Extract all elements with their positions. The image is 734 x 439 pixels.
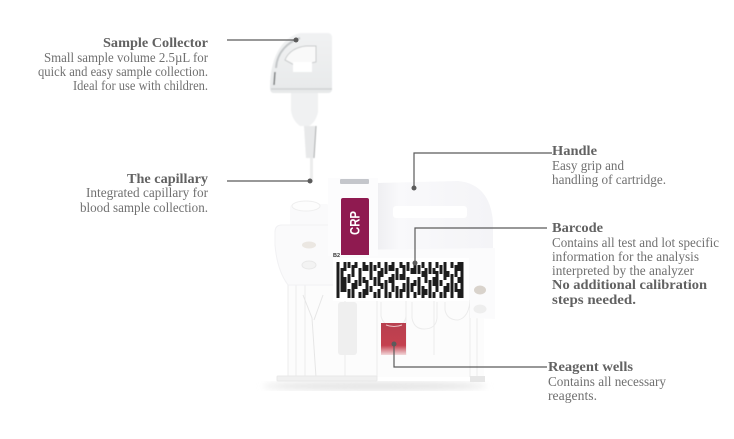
text: sample collector: Ideal for use with children.: [73, 78, 208, 93]
text: barcode: steps needed.: [552, 293, 636, 308]
icon: sample collector: [270, 33, 332, 182]
handle slot: [393, 206, 467, 218]
text: barcode: [552, 221, 719, 308]
shadow: [263, 382, 487, 390]
text: barcode: interpreted by the analyzer: [552, 263, 694, 278]
text: reagent wells: reagents.: [548, 388, 597, 403]
text: handle: Easy grip and: [552, 158, 624, 173]
text: sample collector: [38, 36, 208, 93]
CRP label: CRP: [346, 211, 362, 235]
text: the capillary: Integrated capillary for: [86, 185, 208, 200]
transparent lower body: [277, 285, 485, 382]
text: barcode: No additional calibration: [552, 278, 707, 293]
text: the capillary: blood sample collection.: [80, 200, 208, 215]
text: sample collector: Small sample volume 2.5µL for: [44, 50, 208, 65]
right body: [340, 248, 495, 319]
icon: test cartridge: [263, 178, 495, 390]
text: the capillary: [80, 172, 208, 215]
text: reagent wells: Reagent wells: [548, 360, 634, 375]
text: sample collector: quick and easy sample collection.: [38, 64, 208, 79]
text: barcode: Barcode: [552, 221, 603, 236]
text: handle: [552, 144, 666, 187]
text: barcode: Contains all test and lot specific: [552, 235, 719, 250]
clear wells: [412, 302, 470, 329]
text: reagent wells: [548, 360, 666, 403]
CRP label: [341, 198, 369, 255]
text: the capillary: The capillary: [127, 172, 208, 187]
text: sample collector: Sample Collector: [103, 36, 208, 51]
barcode: [333, 253, 469, 301]
top tab: [328, 178, 378, 256]
callout: leader lines: [227, 38, 552, 367]
barcode: B2: [333, 253, 340, 259]
text: handle: Handle: [552, 144, 597, 159]
text: reagent wells: Contains all necessary: [548, 374, 666, 389]
handle: [376, 181, 493, 250]
red well: [381, 302, 406, 355]
left shoulder: [275, 201, 340, 285]
text: handle: handling of cartridge.: [552, 172, 666, 187]
grey well: [338, 302, 357, 355]
text: barcode: information for the analysis: [552, 249, 699, 264]
